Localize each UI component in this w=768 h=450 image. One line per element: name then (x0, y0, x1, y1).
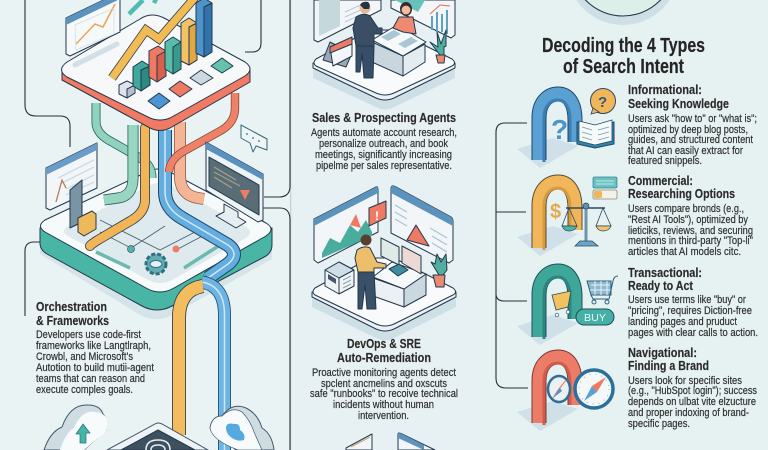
text block: transactional (628, 266, 758, 339)
top chart window (66, 0, 120, 56)
text block: orchestration and frameworks: teams that can reason and (36, 373, 145, 385)
bar 3 (165, 37, 181, 74)
text block: devops and sre auto-remediation: Proactive monitoring agents detect (312, 367, 456, 379)
desk with monitors (373, 238, 426, 307)
text block: navigational: Users look for specific sites (628, 375, 742, 387)
text block: devops and sre auto-remediation: intervention. (358, 410, 409, 422)
right cloud (210, 406, 274, 450)
icon: shopping cart (587, 276, 618, 304)
icon: chat cards (593, 177, 617, 199)
text block: navigational: specific pages. (628, 418, 690, 430)
bar 5 (196, 0, 212, 57)
dark device and orange box (70, 180, 96, 236)
text block: commercial: Users compare bronds (e.g., (628, 203, 744, 215)
trend arrow (112, 0, 198, 78)
icon: dollar sign: $ (550, 201, 561, 223)
right wall panel (391, 0, 455, 38)
icon: open book (577, 120, 614, 148)
text block: devops and sre auto-remediation: spclent ancmelins and oxscuts (321, 378, 447, 390)
pipe: orange (90, 128, 145, 246)
arch: coral (517, 357, 578, 431)
title (542, 34, 705, 78)
left alert window: ! (375, 209, 379, 223)
text block: orchestration and frameworks (36, 300, 154, 396)
text block: commercial: articles that AI models citc. (628, 246, 741, 258)
text block: informational: guides, and structured content (628, 134, 753, 146)
text block: orchestration and frameworks: Developers use code-first (36, 329, 141, 341)
bottom hexagon chip (107, 423, 208, 450)
text block: devops and sre auto-remediation (310, 337, 458, 422)
pipe: peach (180, 122, 204, 199)
pipe: salmon (169, 93, 235, 172)
text block: navigational: Finding a Brand (628, 359, 709, 373)
text block: transactional: landing pages and pruduct (628, 316, 737, 328)
illustration: devops scene (312, 186, 456, 340)
text block: commercial: lieticiks, reviews, and securing (628, 225, 753, 237)
icon: balance scale (562, 203, 611, 246)
calendar (323, 37, 352, 67)
icon: question bubble: ? (598, 94, 607, 111)
text block: informational: Informational: (628, 83, 702, 97)
left alert window (314, 187, 386, 263)
bracket connectors (496, 123, 528, 388)
text block: devops and sre auto-remediation: incidents without human (333, 399, 434, 411)
text block: orchestration and frameworks: Crowbl, and Microsoft's (36, 351, 133, 363)
icon: buy pill: BUY (584, 312, 606, 324)
text block: devops and sre auto-remediation: safe "runbooks" to recoive technical (310, 388, 458, 400)
bar 4 (181, 18, 197, 65)
text block: informational (628, 83, 757, 167)
teal arrow fragment (129, 0, 157, 14)
plant (430, 30, 446, 63)
intent: informational (517, 88, 616, 168)
text block: commercial: Commercial: (628, 174, 693, 188)
icon: large compass (575, 370, 613, 408)
text block: informational: that AI can easily extract for (628, 145, 743, 157)
man at desk (355, 234, 386, 309)
woman (393, 2, 416, 34)
desk (372, 25, 426, 76)
plant (431, 254, 447, 287)
bottom platform circuit lines and gear (96, 220, 220, 274)
devops platform (312, 258, 456, 340)
text block: transactional: Ready to Act (628, 279, 694, 293)
left wall panel (314, 0, 381, 42)
text block: navigational (628, 346, 757, 430)
text block: transactional: Users use terms like "buy" or (628, 294, 746, 306)
text block: orchestration and frameworks: frameworks like Langtlraph, (36, 340, 151, 352)
pipe: blue (165, 130, 234, 278)
text block: navigational: Navigational: (628, 346, 697, 360)
arch: orange (517, 182, 578, 256)
text block: informational: Seeking Knowledge (628, 97, 729, 111)
text block: orchestration and frameworks: Orchestration (36, 300, 107, 314)
pipe: green (96, 103, 152, 200)
bar 2 (149, 46, 166, 82)
top platform (62, 15, 250, 130)
text block: sales and prospecting agents: Agents automate account research, (311, 127, 457, 139)
text block: commercial: Researching Options (628, 187, 735, 201)
arch: blue (517, 94, 578, 168)
connector lines: left column (25, 0, 290, 450)
text block: sales and prospecting agents: pipelme per sales representative. (316, 160, 452, 172)
text block: commercial: "Rest AI Tools"), optimized by (628, 214, 749, 226)
text block: informational: optimized by deep blog posts, (628, 124, 748, 136)
text block: orchestration and frameworks: Autotion to build mutii-agent (36, 362, 154, 374)
server (325, 262, 354, 294)
text block: orchestration and frameworks: & Frameworks (36, 314, 109, 328)
arch: teal (517, 271, 578, 345)
cube (119, 81, 135, 98)
right alert window (391, 186, 453, 263)
left window (46, 143, 97, 210)
man (353, 2, 382, 78)
icon: small compass (548, 376, 570, 402)
right monitor (206, 142, 263, 228)
platform tiles (148, 58, 233, 109)
text block: devops and sre auto-remediation: DevOps & SRE (347, 337, 421, 351)
title: Decoding the 4 Types (542, 34, 705, 57)
icon: question mark: ? (551, 114, 568, 145)
text block: navigational: and proper indoxing of brand- (628, 407, 749, 419)
bottom platform (40, 169, 272, 319)
top circle fragment (567, 0, 679, 25)
intent: commercial (517, 177, 617, 256)
text block: informational: featured snippels. (628, 155, 702, 167)
illustration: orchestration pipelines (40, 93, 272, 450)
text block: commercial (628, 174, 753, 258)
text block: commercial: mentions in third-party "Top-li" (628, 235, 753, 247)
text block: sales and prospecting agents (311, 111, 457, 172)
title: of Search Intent (563, 55, 684, 78)
text block: sales and prospecting agents: Sales & Prospecting Agents (312, 111, 456, 125)
text block: sales and prospecting agents: meetings, significantly increasing (315, 149, 452, 161)
text block: orchestration and frameworks: execute comples goals. (36, 384, 133, 396)
pipes going down to bottom (179, 282, 224, 450)
intent: navigational (517, 357, 613, 431)
bar 1 (133, 61, 150, 91)
text block: transactional: Transactional: (628, 266, 702, 280)
chat bubble (241, 125, 267, 152)
text block: sales and prospecting agents: personalize outreach, and book (319, 138, 449, 150)
text block: devops and sre auto-remediation: Auto-Remediation (337, 351, 431, 365)
bottom book and window fragments (346, 433, 435, 450)
bar chart with trend arrow (112, 0, 212, 98)
left cloud with upload arrow (44, 405, 108, 450)
text block: transactional: "pricing", requires Diction-free (628, 305, 752, 317)
icon: yellow cart (552, 291, 571, 317)
sales platform (313, 30, 455, 110)
intent: transactional (517, 271, 618, 345)
illustration: sales scene (313, 0, 455, 110)
